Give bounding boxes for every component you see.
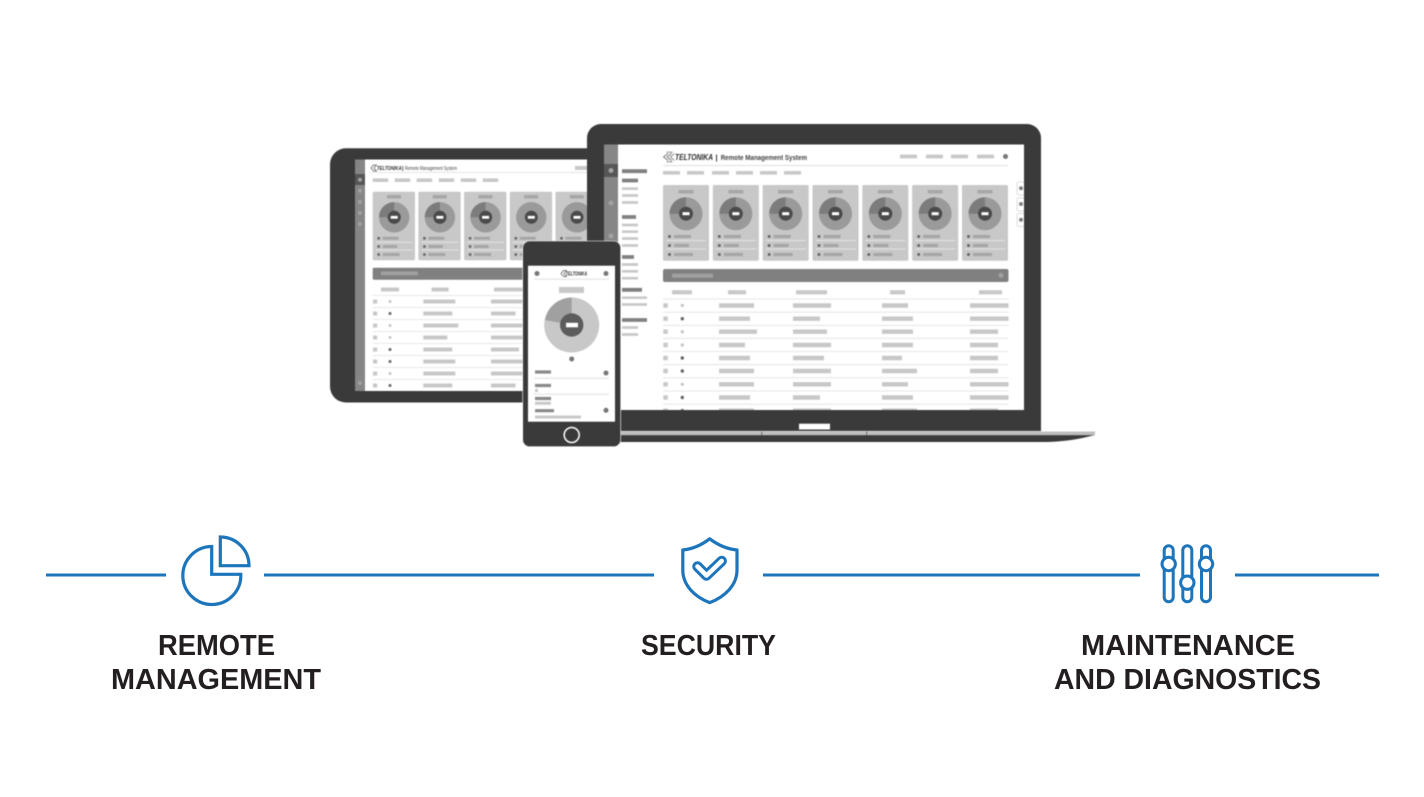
tablet [330, 148, 620, 402]
heading: maintenance and diagnostics [1054, 630, 1321, 696]
laptop base [620, 435, 1095, 442]
tablet sidebar [355, 160, 365, 391]
logo: | [716, 153, 718, 162]
phone list [534, 370, 609, 417]
tablet header: Remote Management System [405, 166, 457, 172]
icon: pie chart [183, 537, 249, 604]
logo [664, 152, 807, 162]
laptop table [663, 292, 1008, 412]
tablet header: | [402, 166, 404, 172]
heading: remote management: MANAGEMENT [111, 664, 321, 696]
phone header [534, 270, 609, 279]
icon: shield with check [683, 539, 737, 603]
logo: TELTONIKA [675, 153, 713, 162]
laptop header [663, 152, 1008, 173]
tablet section bar [372, 267, 524, 280]
laptop body [587, 124, 1041, 431]
tablet stat cards [373, 192, 598, 260]
side buttons [1016, 181, 1024, 228]
laptop sidebar [603, 144, 619, 242]
phone home button [564, 428, 579, 442]
device mockups [330, 124, 1095, 447]
phone pie chart [544, 287, 599, 362]
icon: sliders [1162, 546, 1213, 602]
tablet header: TELTONIKA [377, 166, 402, 172]
laptop navigation menu [622, 171, 647, 334]
heading: remote management: REMOTE [158, 630, 275, 662]
heading: maintenance and diagnostics: AND DIAGNOSTICS [1054, 664, 1321, 696]
phone header: TELTONIKA [566, 272, 587, 278]
phone [523, 241, 621, 447]
heading: security: SECURITY [641, 630, 776, 662]
laptop stat cards [663, 185, 1008, 261]
tablet table [372, 287, 523, 388]
laptop [587, 124, 1095, 442]
logo: Remote Management System [721, 155, 807, 162]
tablet header [370, 165, 590, 180]
heading: remote management [111, 630, 321, 696]
heading: maintenance and diagnostics: MAINTENANCE [1081, 630, 1295, 662]
laptop section bar [663, 269, 1008, 282]
connecting lines [46, 574, 1379, 576]
